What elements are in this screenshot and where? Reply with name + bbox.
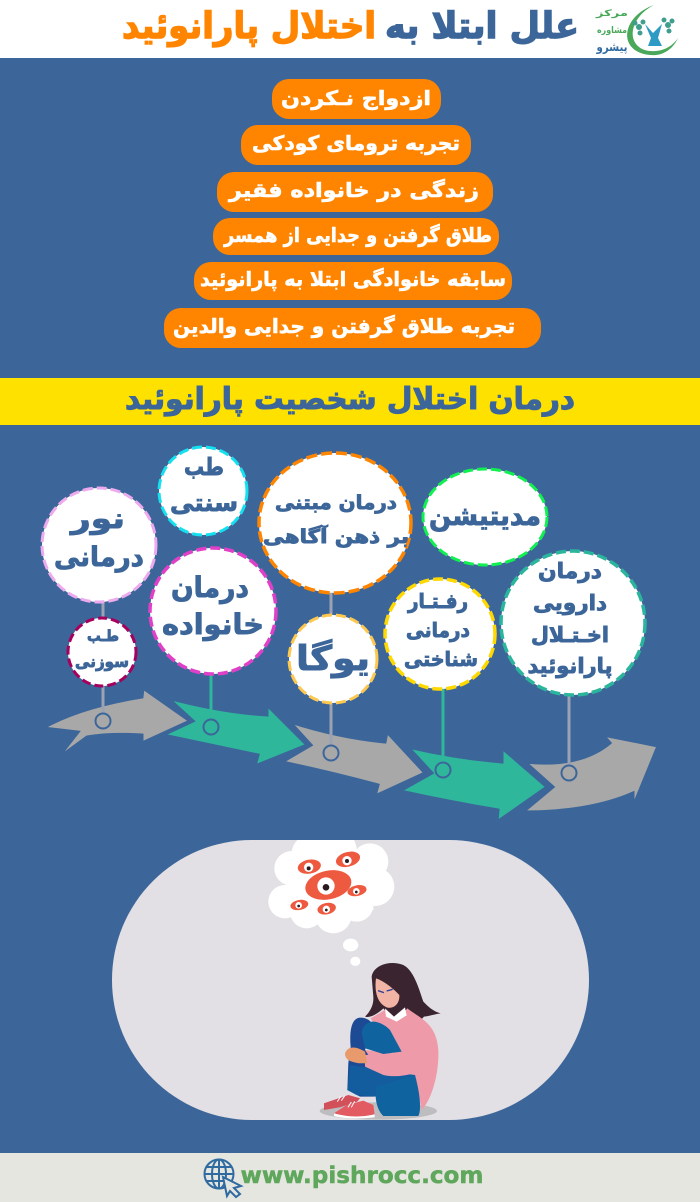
chart: treatment arrows and bubbles: [42, 447, 658, 822]
icon: globe with cursor: [204, 1160, 241, 1197]
stem: acupuncture: [96, 600, 110, 728]
bubble: traditional medicine: سنتی: [170, 489, 238, 517]
pill: family history: سابقه خانوادگی ابتلا به پارانوئید: [200, 267, 506, 292]
bubble: light therapy: [42, 488, 156, 602]
bubble: acupuncture: سوزنی: [75, 652, 129, 671]
pill: divorce from spouse: [213, 218, 499, 255]
bubble: mindfulness-based therapy: [259, 453, 411, 593]
pill: poor family: زندگی در خانواده فقیر: [228, 178, 479, 202]
pill: poor family: [217, 172, 493, 212]
pill: never married: [272, 79, 441, 119]
bubble: mindfulness-based therapy: درمان مبتنی: [275, 492, 397, 514]
bubble: medication: اخـتـلال: [531, 623, 609, 647]
bubble: mindfulness-based therapy: بر ذهن آگاهی: [263, 524, 409, 548]
panel: causes list: [164, 79, 541, 348]
bubble: acupuncture: طـب: [87, 627, 119, 645]
stem: yoga: [324, 592, 338, 760]
bubble: medication: درمان: [538, 559, 602, 583]
bubble: cognitive behavioral therapy: رفـتـار: [407, 589, 468, 613]
bubble: yoga: یوگا: [296, 639, 370, 679]
pill: divorce from spouse: طلاق گرفتن و جدایی از همسر: [223, 223, 492, 247]
pill: parental divorce: [164, 308, 541, 348]
bubble: cognitive behavioral therapy: شناختی: [404, 647, 478, 671]
arrow 3 gray: [282, 722, 425, 796]
bubble: yoga: [289, 615, 377, 703]
stem: medication: [562, 694, 576, 780]
bubble: traditional medicine: طب: [184, 453, 224, 481]
bubble: family therapy: خانواده: [162, 608, 264, 641]
logo: مشاوره: [597, 26, 627, 36]
stem: family therapy: [204, 672, 218, 734]
footer bar: [0, 1153, 700, 1202]
bubble: medication: پارانوئید: [528, 654, 612, 678]
website url: www.pishrocc.com: [240, 1163, 484, 1189]
heading band: treatment: درمان اختلال شخصیت پارانوئید: [125, 382, 575, 417]
logo: پیشرو: [596, 40, 628, 55]
bubble: meditation: مدیتیشن: [429, 501, 541, 532]
illustration: girl and thought bubble: [268, 830, 441, 1120]
logo: مرکز: [595, 9, 628, 19]
bubble: medication: [501, 551, 645, 695]
bubble: meditation: [423, 469, 547, 565]
title: causes of paranoid disorder: علل ابتلا به: [385, 6, 579, 47]
sad girl hugging knees: [320, 963, 441, 1120]
arrow 4 green: [400, 747, 547, 822]
bubble: acupuncture: [68, 618, 136, 686]
bubble: family therapy: [150, 548, 276, 674]
heading band: treatment: [0, 378, 700, 425]
title: causes of paranoid disorder: اختلال پارانوئید: [122, 6, 376, 47]
arrow 1 gray: [43, 688, 190, 759]
bubble: medication: دارویی: [533, 591, 607, 615]
logo: [595, 5, 678, 55]
pill: never married: ازدواج نـکردن: [281, 86, 431, 110]
thought cloud with eyes: [268, 830, 394, 966]
bubble: light therapy: درمانی: [54, 542, 144, 573]
bubble: cognitive behavioral therapy: [385, 579, 495, 689]
pill: childhood trauma: [241, 125, 471, 165]
bubble: family therapy: درمان: [171, 571, 249, 604]
arrow 2 green: [163, 698, 307, 766]
pill: family history: [194, 262, 512, 300]
pill: childhood trauma: تجربه ترومای کودکی: [252, 131, 460, 155]
bubble: light therapy: نور: [69, 502, 125, 535]
illustration panel: [112, 830, 589, 1120]
arrow 5 gray: [523, 735, 658, 812]
pill: parental divorce: تجربه طلاق گرفتن و جدایی والدین: [173, 314, 515, 338]
header bar: [0, 0, 700, 58]
stem: CBT: [436, 688, 450, 778]
bubble: cognitive behavioral therapy: درمانی: [406, 618, 470, 642]
bubble: traditional medicine: [159, 447, 247, 535]
title: causes of paranoid disorder: [122, 6, 579, 47]
